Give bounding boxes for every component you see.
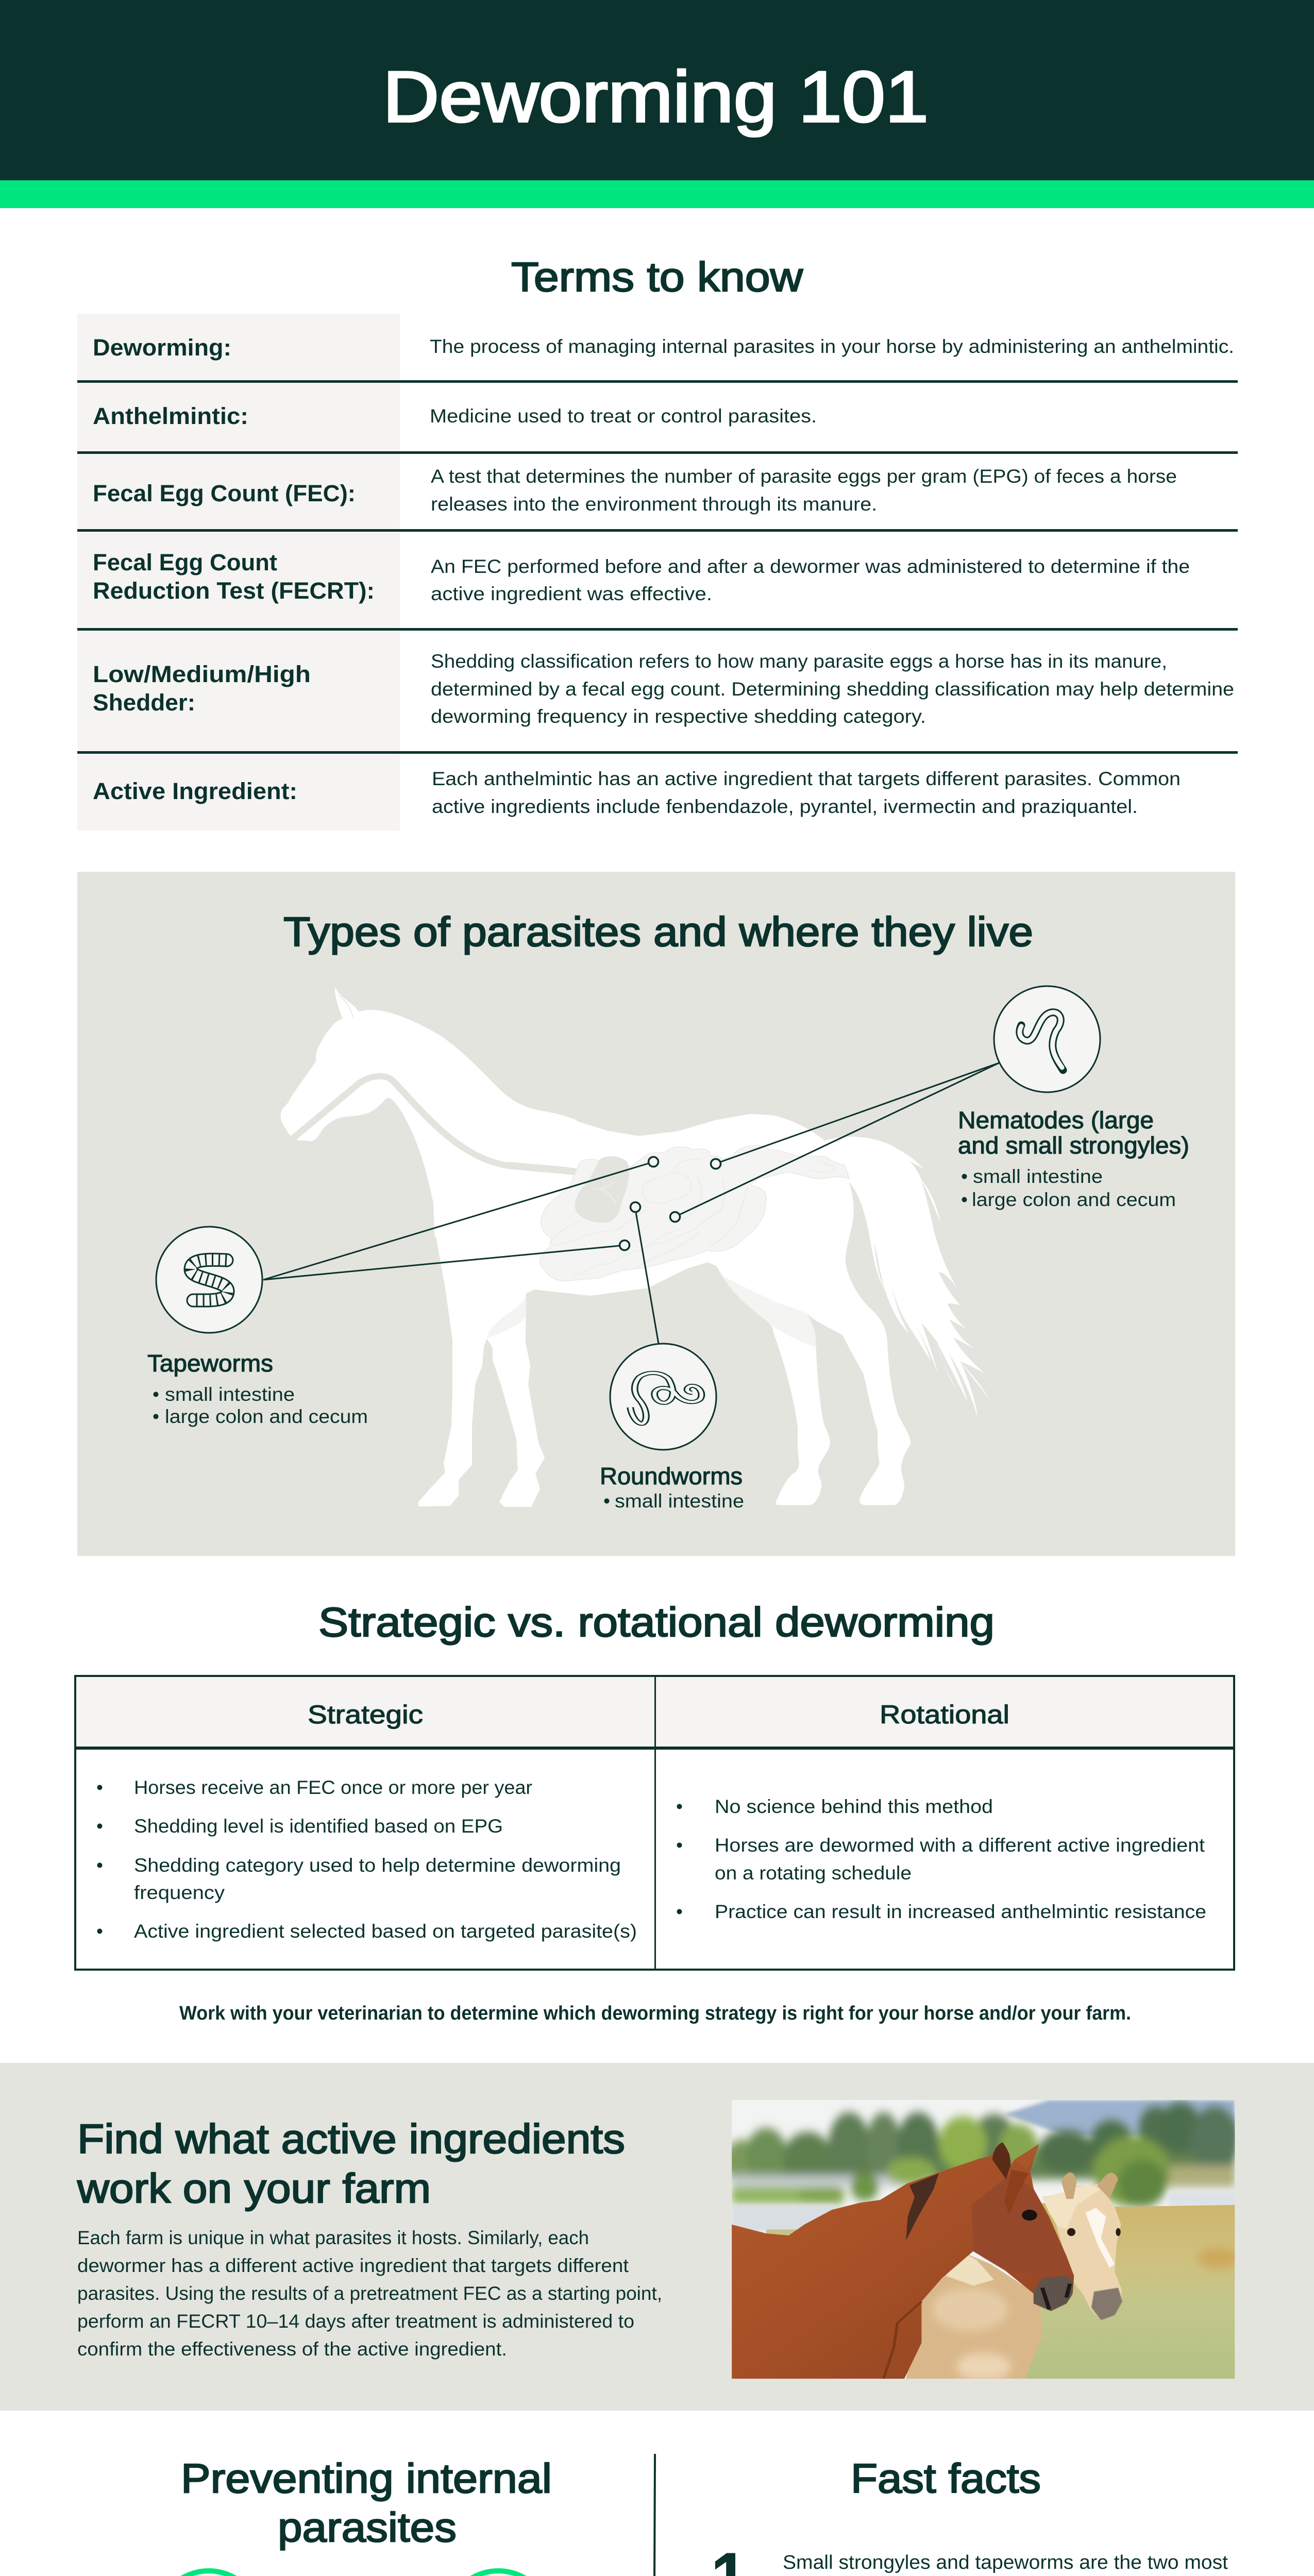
term: deworming: The process of managing internal parasites in your horse by administering an anthelmintic. (430, 336, 1234, 357)
label: tapeworms: • (153, 1406, 159, 1427)
column: rotational: Horses are dewormed with a different active ingredient (715, 1835, 1205, 1856)
green accent stripe (0, 180, 1314, 208)
text block: active ingredients: parasites. Using the results of a pretreatment FEC as a starting point, (77, 2283, 662, 2304)
term: shedder: deworming frequency in respective shedding category. (431, 706, 926, 727)
column: rotational: on a rotating schedule (715, 1862, 912, 1884)
label: nematodes (958, 1107, 1189, 1210)
panel: terms table (77, 314, 1238, 831)
term: anthelmintic: Anthelmintic: (93, 403, 248, 429)
label: nematodes: • (961, 1166, 968, 1187)
term: FECRT: An FEC performed before and after a dewormer was administered to determine if the (431, 556, 1190, 577)
fact 1 (711, 2537, 1240, 2576)
term: fecal egg count: Fecal Egg Count (FEC): (93, 480, 356, 506)
column: rotational: • (676, 1901, 683, 1922)
label: roundworms: • (603, 1490, 610, 1512)
text block: active ingredients: dewormer has a different active ingredient that targets different (77, 2255, 629, 2276)
divider: vertical rule (653, 2454, 655, 2576)
target dots (619, 1157, 720, 1250)
fact 1: Small strongyles and tapeworms are the two most (783, 2552, 1228, 2573)
label: nematodes: small intestine (973, 1166, 1103, 1187)
column: strategic: • (96, 1816, 103, 1837)
column: rotational (676, 1700, 1206, 1922)
horse hind legs (722, 1115, 990, 1505)
column: strategic: Shedding category used to help determine deworming (134, 1855, 621, 1876)
icon: sparkles (446, 2571, 551, 2576)
term: FECRT: Fecal Egg Count (93, 549, 277, 575)
icon: bucket and mop (156, 2571, 261, 2576)
label: nematodes: • (961, 1189, 968, 1210)
column: rotational: Rotational (880, 1700, 1009, 1729)
connector lines (263, 1063, 999, 1344)
label: nematodes: and small strongyles) (958, 1132, 1189, 1159)
label: tapeworms (147, 1350, 368, 1427)
panel: parasites background (77, 872, 1235, 1556)
heading: strategic vs rotational: Strategic vs. rotational deworming (318, 1599, 995, 1645)
column: strategic: Strategic (308, 1700, 423, 1729)
photo: two horses in a field (725, 2100, 1239, 2380)
heading: preventing internal parasites: parasites (278, 2504, 457, 2550)
term: anthelmintic (93, 403, 817, 429)
column: strategic: Active ingredient selected based on targeted parasite(s) (134, 1921, 637, 1942)
term: active ingredient (93, 768, 1181, 817)
term: shedder: Shedding classification refers to how many parasite eggs a horse has in its manure, (431, 651, 1167, 672)
column: rotational: • (676, 1835, 683, 1856)
column: strategic (96, 1700, 637, 1942)
heading: find what active ingredients: Find what active ingredients (77, 2116, 625, 2162)
column: rotational: No science behind this method (715, 1796, 993, 1817)
heading: preventing internal parasites: Preventing internal (181, 2455, 552, 2501)
term: FECRT: Reduction Test (FECRT): (93, 578, 375, 604)
column: strategic: • (96, 1855, 103, 1876)
column: strategic: • (96, 1777, 103, 1798)
heading: preventing internal parasites (181, 2455, 552, 2550)
term: fecal egg count: releases into the environment through its manure. (431, 494, 877, 515)
header band (0, 0, 1314, 180)
panel: active ingredients background (0, 2063, 1314, 2411)
column: strategic: Shedding level is identified based on EPG (134, 1816, 503, 1837)
label: roundworms: Roundworms (600, 1463, 743, 1489)
term: FECRT: active ingredient was effective. (431, 583, 712, 604)
label: tapeworms: Tapeworms (147, 1350, 273, 1377)
horse silhouette with organs (281, 987, 990, 1507)
term: active ingredient: Each anthelmintic has an active ingredient that targets different parasites. Common (432, 768, 1181, 789)
label: tapeworms: • (153, 1384, 159, 1405)
text block: active ingredients: Each farm is unique in what parasites it hosts. Similarly, each (77, 2227, 589, 2248)
text block: active ingredients (77, 2227, 662, 2360)
text block: active ingredients: perform an FECRT 10–14 days after treatment is administered to (77, 2311, 634, 2332)
title: Deworming 101 (383, 56, 929, 137)
column: rotational: • (676, 1796, 683, 1817)
term: deworming: Deworming: (93, 334, 231, 361)
icon: roundworm (610, 1344, 716, 1450)
term: fecal egg count: A test that determines the number of parasite eggs per gram (EPG) of feces a horse (431, 466, 1177, 487)
term: shedder: Low/Medium/High (93, 661, 311, 687)
callout: work with your veterinarian: Work with your veterinarian to determine which deworming strategy is right for your horse and/or your farm. (179, 2003, 1131, 2024)
column: strategic: frequency (134, 1882, 225, 1903)
label: tapeworms: large colon and cecum (165, 1406, 368, 1427)
label: nematodes: Nematodes (large (958, 1107, 1154, 1133)
label: roundworms: small intestine (615, 1490, 744, 1512)
horse head and neck (281, 987, 580, 1236)
term: shedder: Shedder: (93, 689, 195, 716)
term: deworming (93, 334, 1234, 361)
column: strategic: • (96, 1921, 103, 1942)
heading: types of parasites: Types of parasites and where they live (283, 909, 1033, 955)
label: roundworms (600, 1463, 744, 1512)
panel: comparison table (75, 1676, 1234, 1970)
heading: find what active ingredients (77, 2116, 625, 2211)
heading: find what active ingredients: work on your farm (77, 2165, 431, 2211)
term: FECRT (93, 549, 1190, 604)
term: shedder (93, 651, 1234, 727)
icon: nematode (994, 986, 1100, 1092)
label: tapeworms: small intestine (165, 1384, 295, 1405)
column: strategic: Horses receive an FEC once or more per year (134, 1777, 532, 1798)
term: fecal egg count (93, 466, 1177, 515)
term: shedder: determined by a fecal egg count. Determining shedding classification may help determine (431, 679, 1234, 700)
heading: terms to know: Terms to know (511, 254, 803, 300)
icon: tapeworm (156, 1227, 262, 1333)
far foreleg shading (487, 1295, 526, 1338)
label: nematodes: large colon and cecum (972, 1189, 1176, 1210)
column: rotational: Practice can result in increased anthelmintic resistance (715, 1901, 1206, 1922)
horse tail (824, 1137, 990, 1419)
term: anthelmintic: Medicine used to treat or control parasites. (430, 405, 817, 427)
digestive tract (507, 1145, 850, 1281)
horse torso and front legs (418, 1114, 774, 1507)
term: active ingredient: active ingredients include fenbendazole, pyrantel, ivermectin and praziquantel. (432, 796, 1138, 817)
term: active ingredient: Active Ingredient: (93, 778, 297, 804)
text block: active ingredients: confirm the effectiveness of the active ingredient. (77, 2338, 507, 2360)
heading: fast facts: Fast facts (851, 2455, 1041, 2501)
